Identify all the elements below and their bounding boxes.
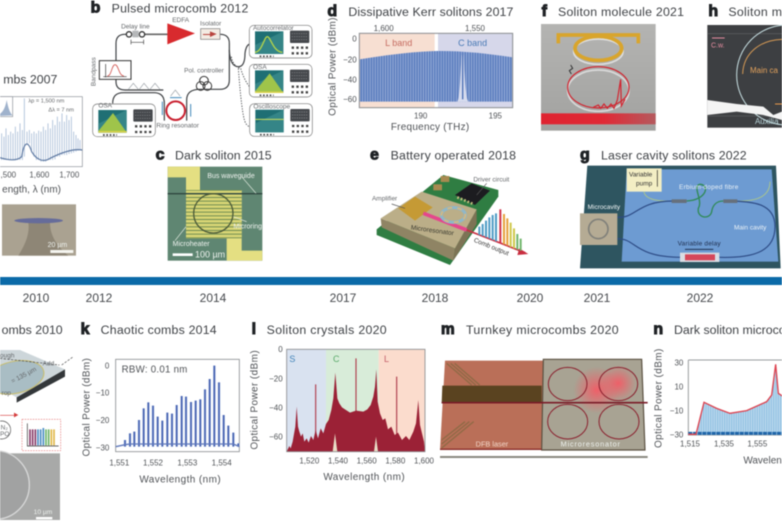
title: soliton m: Soliton m	[728, 5, 782, 19]
microscope image: 100 µm	[195, 250, 225, 260]
title: dark soliton: Dark soliton 2015	[175, 148, 272, 162]
panel h: soliton microcomb, clipped	[707, 3, 782, 128]
spectrum chart: −20	[343, 55, 357, 64]
device illustration: Microresonator	[410, 224, 455, 237]
photo: Auxilia	[755, 117, 779, 126]
device illustration	[372, 175, 528, 265]
spectrum chart: 1,700	[59, 171, 80, 180]
spectrum chart: −60	[343, 95, 357, 104]
panel letter e: e	[370, 146, 379, 163]
device illustration: Main cavity	[734, 224, 767, 231]
device illustration: Amplifier	[372, 195, 398, 202]
pulse shapes	[128, 83, 180, 96]
oscilloscope instrument	[250, 103, 312, 136]
title: chaotic combs: Chaotic combs 2014	[101, 323, 217, 337]
spectrum chart	[653, 349, 782, 466]
spectrum chart: −20	[269, 374, 283, 383]
spectrum chart: 190	[414, 111, 428, 120]
spectrum chart: Wavelength (nm)	[323, 472, 405, 483]
device illustration: DFB laser	[476, 439, 509, 448]
spectrum chart: 1,600	[374, 24, 394, 33]
timeline years: 2022	[687, 291, 714, 305]
OSA instrument: OSA	[98, 103, 113, 110]
spectrum chart	[81, 358, 239, 485]
spectrum chart: Frequency (THz)	[391, 122, 469, 133]
spectrum chart: 1,553	[177, 458, 198, 467]
spectrum chart: −40	[343, 76, 357, 85]
panel k: chaotic combs 2014	[81, 321, 239, 485]
ring and comb inset	[0, 419, 61, 451]
panel letter l: l	[252, 321, 256, 338]
microscope image: Microring	[233, 224, 262, 231]
panel b: pulsed microcomb 2012	[90, 0, 312, 137]
spectrum chart: 1,580	[385, 456, 406, 465]
ring and comb inset: PO	[0, 431, 9, 438]
title: dissipative Kerr solitons: Dissipative Kerr solitons 2017	[348, 5, 513, 19]
ring and comb inset: N₂	[1, 424, 8, 431]
autocorrelator instrument: Autocorrelator	[253, 25, 295, 32]
fibre loop	[113, 34, 250, 127]
timeline years: 2010	[23, 291, 50, 305]
spectrum chart: λp = 1,500 nm	[28, 99, 65, 105]
OSA instrument	[93, 103, 155, 137]
spectrum chart: 10	[674, 383, 684, 392]
spectrum chart: RBW: 0.01 nm	[122, 365, 187, 376]
spectrum chart: −40	[269, 403, 283, 412]
panel l: soliton crystals 2020	[249, 321, 435, 483]
spectrum chart: S	[289, 354, 295, 364]
bandpass filter	[90, 56, 131, 86]
spectrum chart: −30	[670, 431, 684, 440]
bandpass filter: Bandpass	[90, 56, 97, 86]
panel n: dark soliton microcombs	[653, 321, 782, 466]
microscope image: Bus waveguide	[207, 173, 255, 180]
ring resonator: Ring resonator	[156, 123, 200, 130]
spectrum chart: −20	[96, 416, 110, 425]
OSA instrument right	[249, 64, 312, 97]
device illustration	[440, 359, 648, 458]
spectrum chart	[249, 345, 435, 483]
panel letter c: c	[156, 146, 165, 163]
panel j: combs 2010	[0, 323, 73, 520]
EDFA amplifier	[167, 17, 195, 44]
panel letter g: g	[580, 146, 590, 163]
panel letter h: h	[708, 3, 718, 20]
panel m: turnkey microcombs 2020	[440, 321, 648, 458]
title: combs 2010: ombs 2010	[2, 323, 63, 337]
timeline years: 2012	[86, 291, 113, 305]
timeline years: 2014	[200, 291, 227, 305]
title: soliton crystals: Soliton crystals 2020	[267, 323, 387, 337]
panel letter f: f	[542, 3, 548, 20]
SEM image: microtoroid: 20 µm	[48, 242, 67, 249]
isolator: Isolator	[200, 21, 222, 28]
spectrum chart: 1,555	[747, 440, 768, 449]
spectrum chart: −60	[269, 433, 283, 442]
title: turnkey microcombs: Turnkey microcombs 2020	[466, 323, 619, 337]
timeline bar	[0, 277, 782, 285]
spectrum chart: 30	[674, 359, 684, 368]
spectrum chart: Optical Power (dBm)	[249, 350, 260, 450]
photo: C.w.	[711, 43, 725, 50]
microscope image: Microheater	[173, 241, 210, 248]
panel d: dissipative Kerr solitons 2017	[327, 3, 513, 133]
spectrum chart: −30	[96, 444, 110, 453]
spectrum chart: 1,560	[357, 456, 377, 465]
EDFA amplifier: EDFA	[172, 17, 190, 24]
autocorrelator instrument	[249, 25, 312, 58]
title: battery operated: Battery operated 2018	[391, 148, 516, 162]
device illustration: Microcavity	[588, 204, 621, 211]
timeline years: 2021	[584, 291, 611, 305]
spectrum chart: Optical Power (dBm)	[328, 17, 339, 116]
spectrum chart: 1,515	[680, 440, 701, 449]
device illustration: pump	[636, 180, 653, 187]
spectrum chart: 0	[278, 345, 283, 354]
spectrum chart: 1,600	[29, 171, 50, 180]
spectrum chart	[328, 17, 513, 133]
spectrum chart: 1,540	[328, 456, 349, 465]
title: soliton molecule: Soliton molecule 2021	[558, 5, 684, 19]
photo	[707, 25, 782, 128]
panel letter d: d	[327, 3, 337, 20]
spectrum chart: 1,554	[212, 458, 232, 467]
device illustration: Comb output	[473, 237, 510, 258]
title: pulsed microcomb: Pulsed microcomb 2012	[112, 2, 248, 16]
delay line	[121, 24, 150, 44]
timeline years: 2018	[422, 291, 449, 305]
spectrum chart: 0	[352, 35, 357, 44]
title: laser cavity solitons: Laser cavity solitons 2022	[601, 148, 747, 162]
chip illustration: rop	[2, 390, 11, 397]
device illustration: Microresonator	[561, 439, 621, 448]
panel e: battery operated 2018	[370, 146, 528, 265]
panel g: laser cavity solitons 2022	[580, 146, 781, 268]
oscilloscope instrument: Oscilloscope	[253, 103, 290, 110]
ring resonator	[156, 98, 200, 130]
timeline years: 2017	[330, 291, 357, 305]
device illustration: Erbium-doped fibre	[679, 184, 739, 191]
device illustration: Variable	[629, 172, 653, 179]
spectrum chart: ength, λ (nm)	[2, 184, 61, 195]
panel letter m: m	[441, 321, 455, 338]
chip illustration: Add	[43, 360, 55, 367]
spectrum chart: 1,552	[143, 458, 164, 467]
panel letter k: k	[81, 321, 90, 338]
spectrum chart: Optical Power (dBm)	[653, 349, 664, 448]
red pump arrow	[0, 413, 18, 417]
timeline years	[23, 291, 714, 305]
micrograph	[0, 451, 60, 520]
OSA instrument right: OSA	[253, 64, 267, 71]
chip illustration: ough	[0, 352, 15, 359]
micrograph: 10 µm	[34, 509, 53, 516]
timeline years: 2020	[517, 291, 544, 305]
panel letter n: n	[653, 321, 663, 338]
spectrum chart: ,500	[1, 171, 17, 180]
photo: Main ca	[750, 66, 779, 75]
spectrum chart: 195	[489, 111, 503, 120]
panel a: microresonator combs 2007	[0, 72, 82, 256]
spectrum chart: 1,535	[714, 440, 735, 449]
panel letter b: b	[91, 0, 101, 17]
spectrum chart: Optical Power (dBm)	[81, 358, 92, 456]
device illustration: Driver circuit	[473, 177, 510, 184]
chip illustration	[0, 350, 73, 403]
device illustration: Variable delay	[678, 241, 721, 248]
spectrum chart: L	[384, 354, 389, 364]
device illustration	[580, 166, 781, 268]
isolator	[200, 21, 222, 39]
spectrum chart: Δλ = 7 nm	[48, 107, 74, 113]
spectrum chart: 1,551	[109, 458, 130, 467]
device illustration	[541, 24, 656, 131]
spectrum chart: C band	[458, 38, 487, 48]
polarization controller	[184, 68, 225, 90]
spectrum chart: −10	[670, 407, 684, 416]
microscope image	[168, 167, 262, 261]
polarization controller: Pol. controller	[184, 68, 225, 75]
SEM image: microtoroid	[2, 204, 76, 256]
spectrum chart: C	[333, 354, 340, 364]
spectrum chart: −10	[96, 389, 110, 398]
panel f: soliton molecule 2021	[541, 3, 684, 131]
spectrum chart: 0	[105, 361, 110, 370]
title: combs 2007: mbs 2007	[3, 72, 57, 86]
spectrum chart: 1,550	[465, 24, 486, 33]
chip illustration: = 135 µm	[10, 366, 38, 385]
spectrum chart	[0, 97, 82, 195]
spectrum chart: L band	[385, 38, 412, 48]
delay line: Delay line	[121, 24, 150, 31]
spectrum chart: 1,600	[414, 456, 435, 465]
spectrum chart: 1,520	[299, 456, 320, 465]
panel c: dark soliton 2015	[156, 146, 272, 261]
spectrum chart: Wavelength (nm)	[139, 474, 221, 485]
